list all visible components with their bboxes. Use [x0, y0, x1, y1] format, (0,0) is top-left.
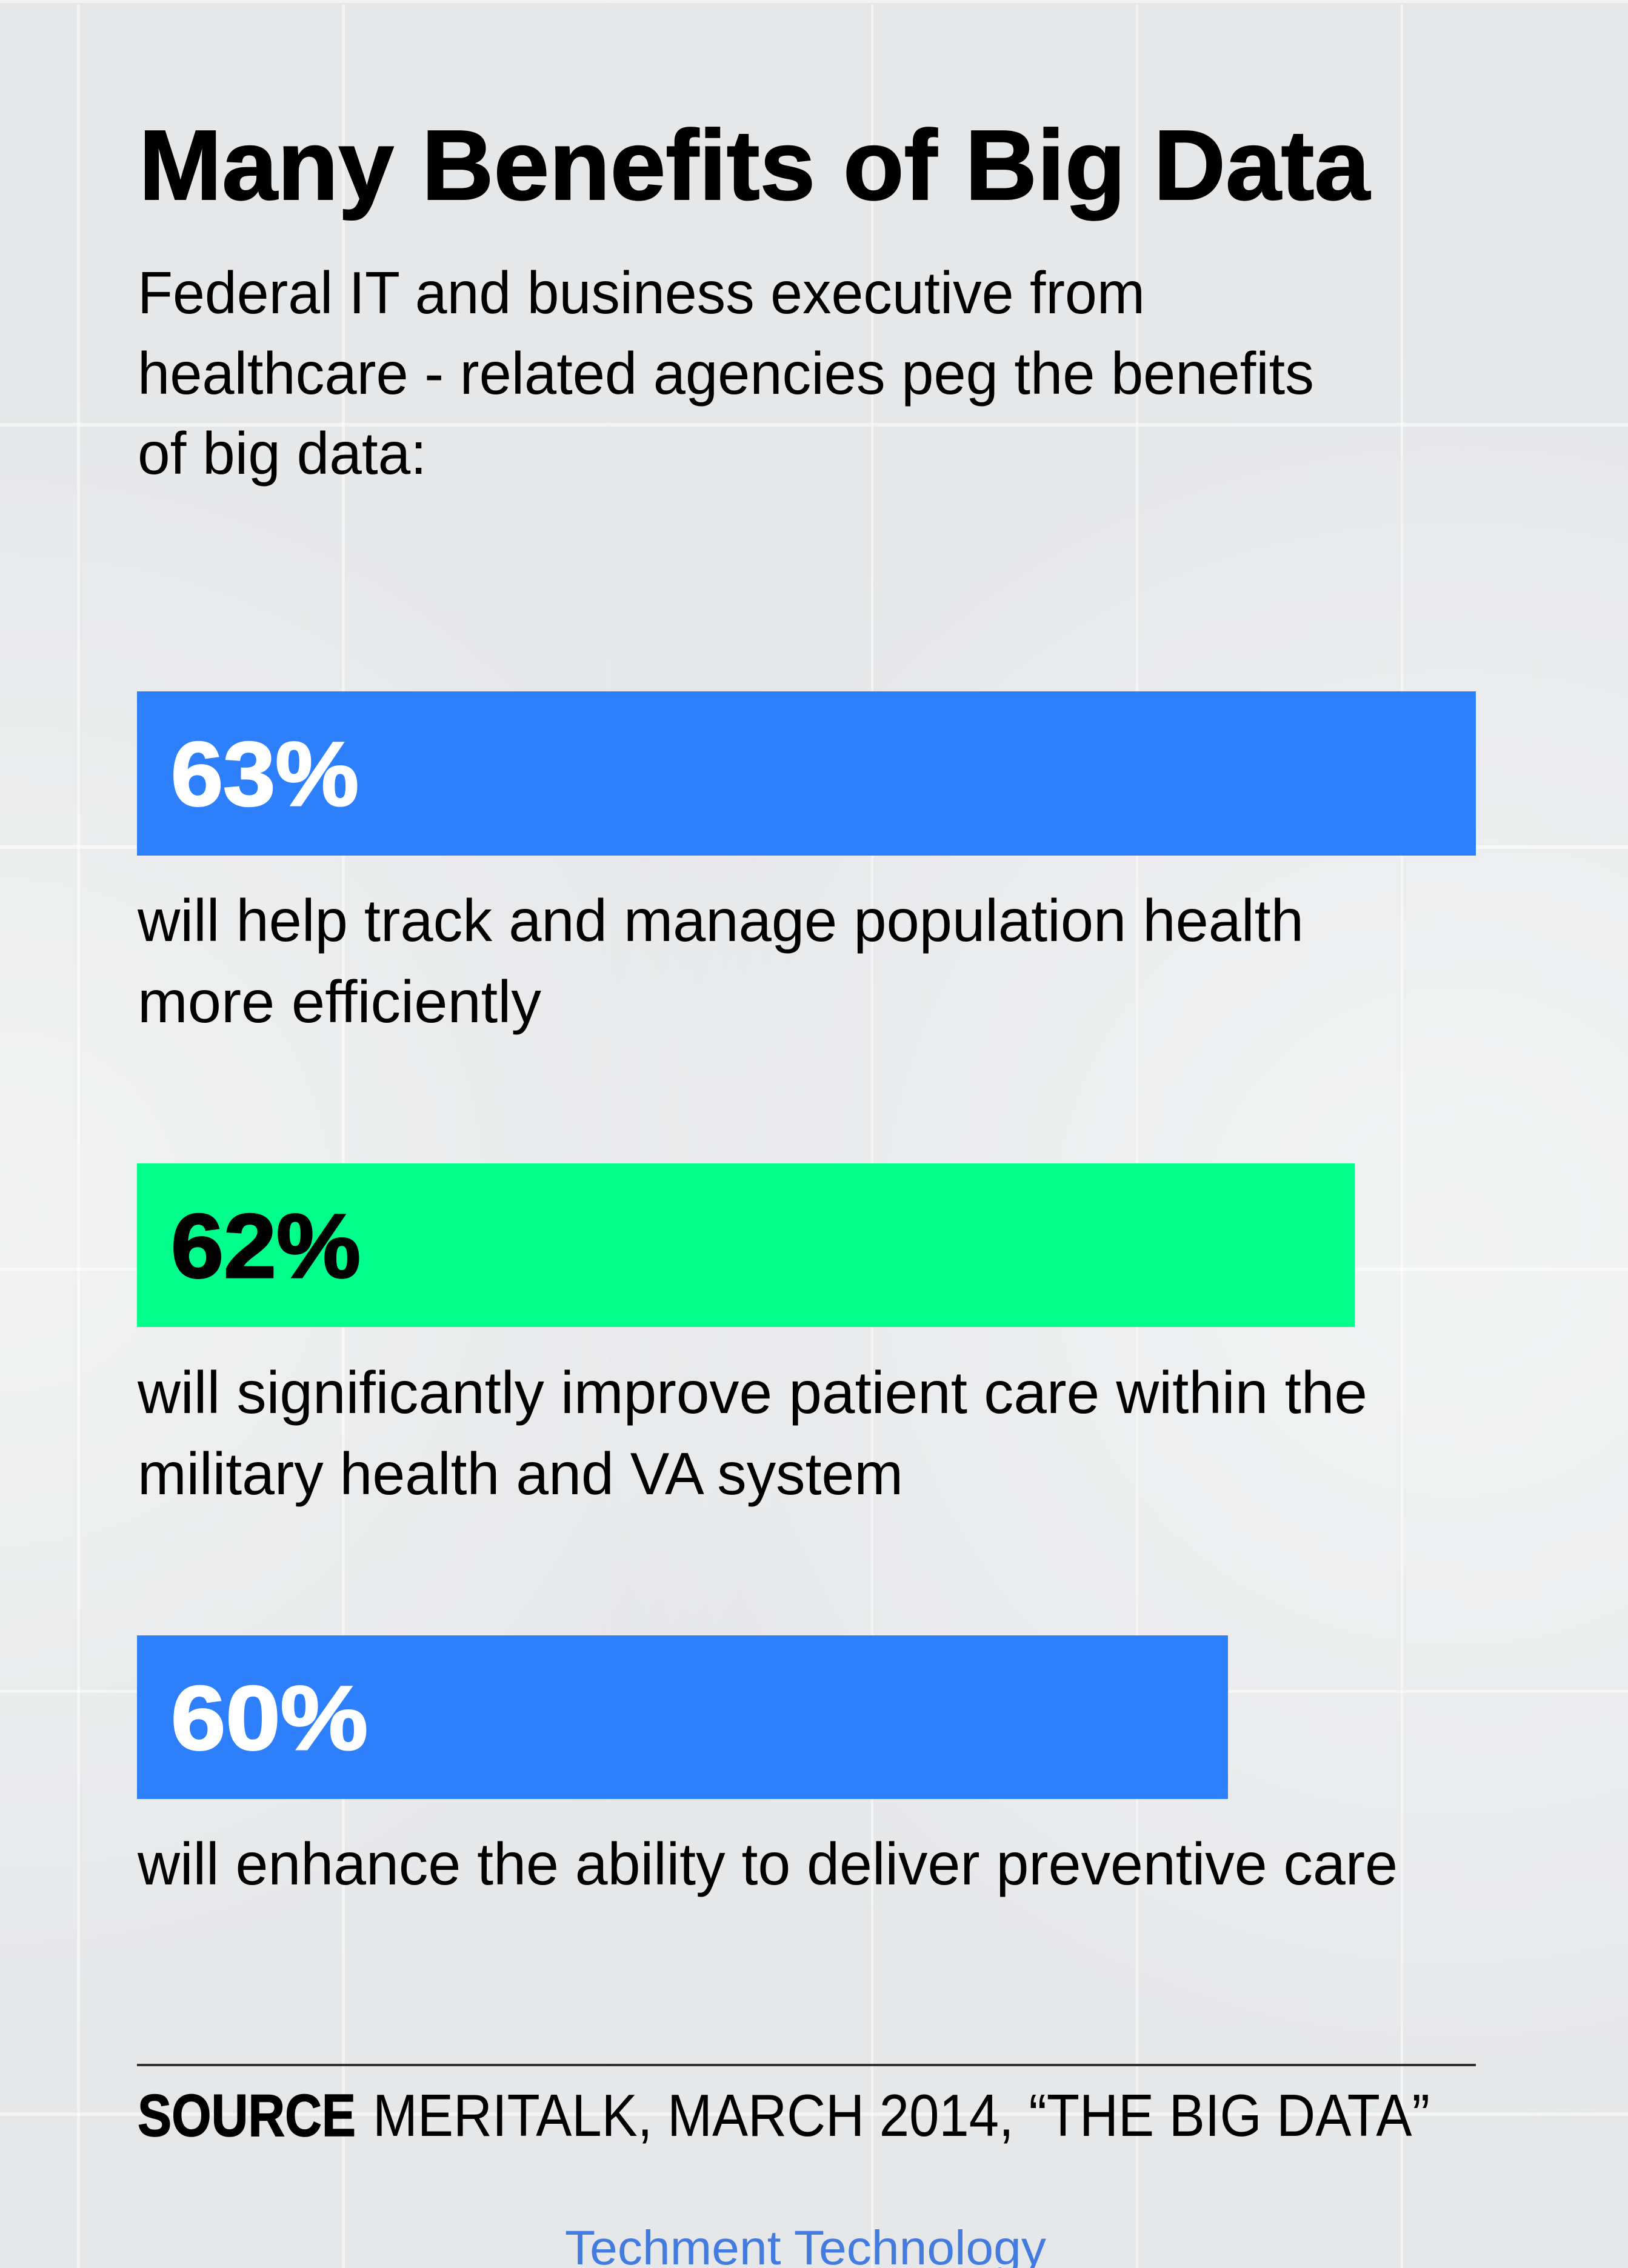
bar: 62%: [137, 1163, 1355, 1327]
stat: 63%: [137, 691, 1476, 1035]
bar: 60%: [137, 1635, 1228, 1799]
intro text block: Federal IT and business executive from: [138, 259, 1145, 326]
bar: 63%: [137, 691, 1476, 856]
stat: 60%: [137, 1635, 1398, 1897]
description: 62%: military health and VA system: [138, 1440, 903, 1507]
description: 62%: [137, 1359, 1367, 1507]
title: Many Benefits of Big Data: [139, 110, 1371, 221]
value: 60%: 60%: [171, 1667, 368, 1769]
value: 62%: 62%: [171, 1195, 361, 1297]
source line: MERITALK, MARCH 2014, “THE BIG DATA”: [373, 2082, 1430, 2149]
source divider: [137, 2064, 1476, 2066]
intro text block: healthcare - related agencies peg the benefits: [138, 340, 1314, 407]
source line: SOURCE: [138, 2082, 356, 2149]
value: 63%: 63%: [171, 723, 359, 825]
stat: 62%: [137, 1163, 1367, 1507]
intro text block: of big data:: [138, 420, 427, 487]
intro text block: [138, 259, 1314, 487]
description: 63%: more efficiently: [138, 968, 541, 1035]
description: 62%: will significantly improve patient care within the: [137, 1359, 1367, 1426]
description: 63%: [137, 887, 1304, 1035]
description: 60%: will enhance the ability to deliver preventive care: [137, 1831, 1398, 1897]
description: 63%: will help track and manage population health: [137, 887, 1304, 954]
